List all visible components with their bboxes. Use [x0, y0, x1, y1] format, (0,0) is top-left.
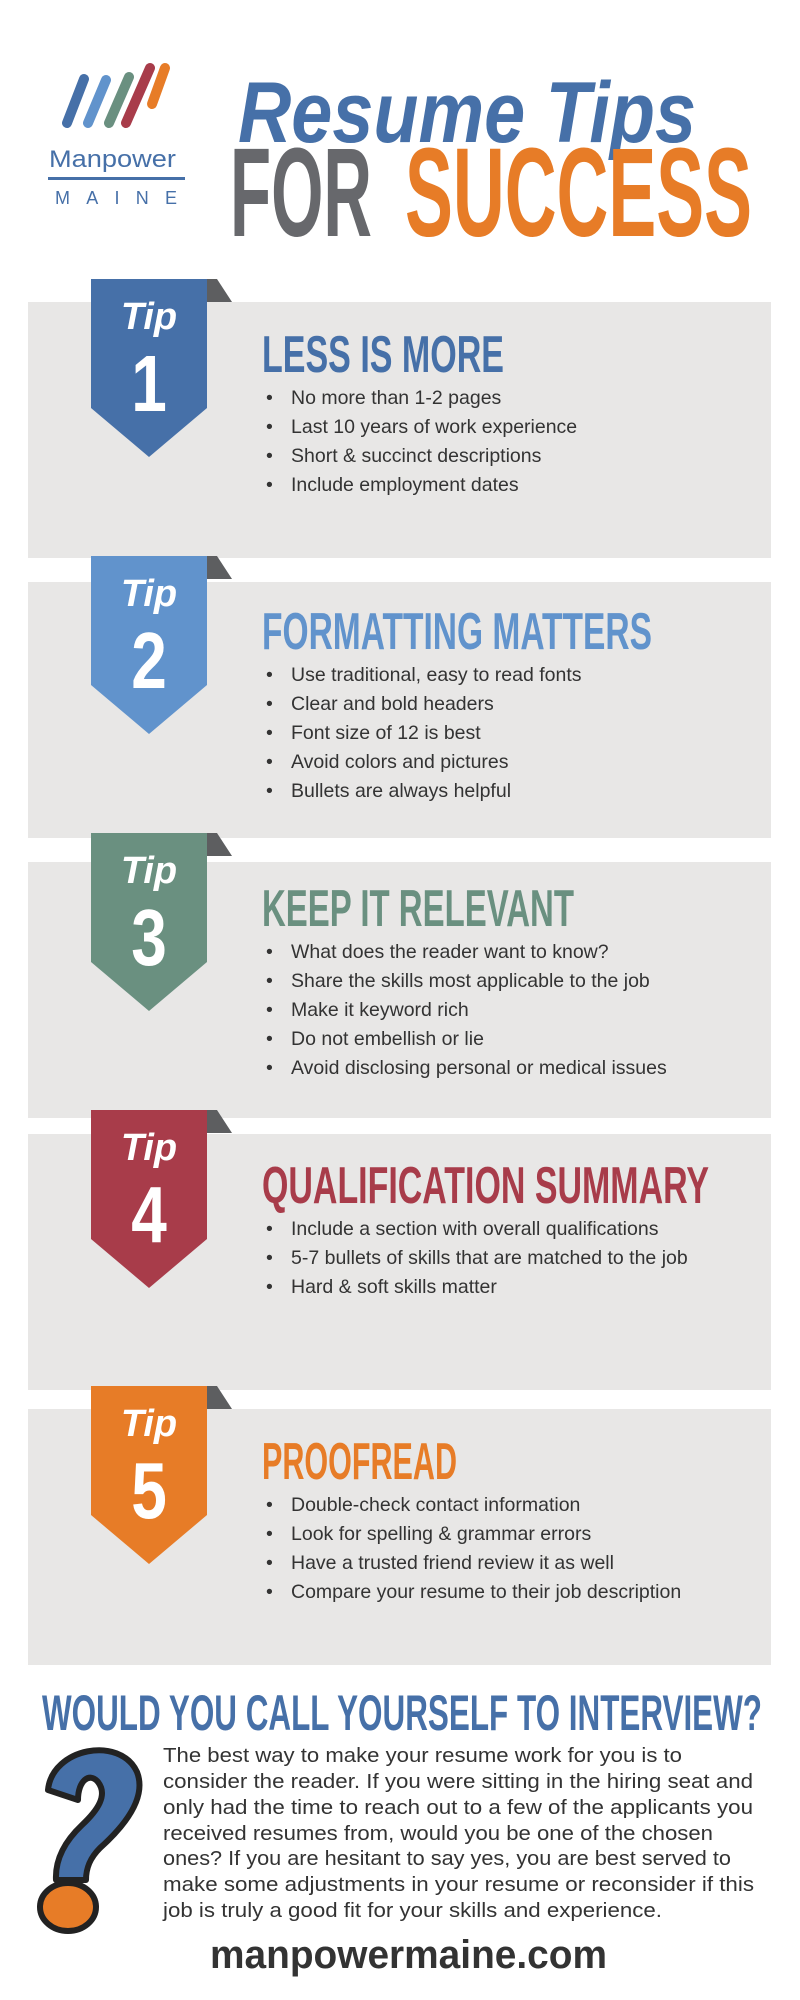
- bullets: tip 3: •: [266, 1057, 273, 1079]
- ribbon: tip 3: Tip: [121, 850, 177, 892]
- text block: paragraph: received resumes from, would you be one of the chosen: [163, 1823, 713, 1845]
- text block: paragraph: The best way to make your resume work for you is to: [163, 1745, 682, 1767]
- bullets: tip 3: Avoid disclosing personal or medical issues: [291, 1057, 667, 1079]
- bullets: tip 1: No more than 1-2 pages: [291, 387, 502, 409]
- bullets: tip 5: Have a trusted friend review it as well: [291, 1552, 614, 1574]
- bullets: tip 3: •: [266, 1028, 273, 1050]
- icon: question mark: [40, 1750, 139, 1931]
- bullets: tip 1: •: [266, 387, 273, 409]
- icon: logo stripes: [67, 68, 165, 123]
- text block: paragraph: only had the time to reach out to a few of the applicants you: [163, 1797, 753, 1819]
- bullets: tip 5: Double-check contact information: [291, 1494, 580, 1516]
- bullets: tip 2: •: [266, 780, 273, 802]
- bullets: tip 2: •: [266, 751, 273, 773]
- ribbon: tip 4: 4: [131, 1170, 167, 1260]
- bullets: tip 5: •: [266, 1523, 273, 1545]
- ribbon: tip 2: [91, 556, 232, 734]
- bullets: tip 3: What does the reader want to know?: [291, 941, 609, 963]
- bullets: tip 2: Font size of 12 is best: [291, 722, 481, 744]
- title: [230, 65, 752, 263]
- logo text: Manpower: [49, 146, 176, 173]
- bullets: tip 4: •: [266, 1218, 273, 1240]
- bullets: tip 4: Hard & soft skills matter: [291, 1276, 497, 1298]
- bullets: tip 2: •: [266, 693, 273, 715]
- ribbon: tip 3: [91, 833, 232, 1011]
- ribbon: tip 1: 1: [131, 339, 167, 429]
- ribbon: tip 5: 5: [131, 1446, 167, 1536]
- heading: proofread: PROOFREAD: [262, 1433, 457, 1491]
- panel: tip 3: [28, 833, 771, 1118]
- bullets: tip 2: •: [266, 722, 273, 744]
- title: FOR: [230, 122, 372, 263]
- bullets: tip 1: Short & succinct descriptions: [291, 445, 542, 467]
- text block: paragraph: consider the reader. If you were sitting in the hiring seat and: [163, 1771, 753, 1793]
- bullets: tip 1: •: [266, 416, 273, 438]
- bullets: tip 1: [266, 387, 577, 496]
- bullets: tip 2: [266, 664, 582, 802]
- bullets: tip 2: Bullets are always helpful: [291, 780, 511, 802]
- ribbon: tip 3: 3: [131, 893, 167, 983]
- bullets: tip 4: •: [266, 1276, 273, 1298]
- ribbon: tip 2: Tip: [121, 573, 177, 615]
- ribbon: tip 4: Tip: [121, 1127, 177, 1169]
- bullets: tip 3: Make it keyword rich: [291, 999, 469, 1021]
- bullets: tip 3: •: [266, 999, 273, 1021]
- title: Resume Tips: [238, 65, 696, 161]
- bullets: tip 2: Clear and bold headers: [291, 693, 494, 715]
- panel: tip 2: [28, 556, 771, 838]
- bullets: tip 2: •: [266, 664, 273, 686]
- bullets: tip 2: Use traditional, easy to read fonts: [291, 664, 582, 686]
- text block: paragraph: ones? If you are hesitant to say yes, you are best served to: [163, 1848, 731, 1870]
- heading: less is more: LESS IS MORE: [262, 326, 504, 384]
- bullets: tip 2: Avoid colors and pictures: [291, 751, 509, 773]
- bullets: tip 4: Include a section with overall qualifications: [291, 1218, 659, 1240]
- text block: paragraph: job is truly a good fit for your skills and experience.: [162, 1900, 662, 1922]
- bullets: tip 5: •: [266, 1494, 273, 1516]
- bullets: tip 5: •: [266, 1581, 273, 1603]
- footer: website: manpowermaine.com: [210, 1933, 607, 1977]
- bullets: tip 4: 5-7 bullets of skills that are matched to the job: [291, 1247, 688, 1269]
- heading: keep it relevant: KEEP IT RELEVANT: [262, 880, 574, 938]
- bullets: tip 4: [266, 1218, 688, 1298]
- bullets: tip 5: [266, 1494, 681, 1603]
- logo: MAINE: [55, 188, 177, 208]
- bullets: tip 1: Include employment dates: [291, 474, 519, 496]
- bullets: tip 4: •: [266, 1247, 273, 1269]
- bullets: tip 1: •: [266, 474, 273, 496]
- ribbon: tip 4: [91, 1110, 232, 1288]
- panel: tip 1: [28, 279, 771, 558]
- bullets: tip 5: Compare your resume to their job description: [291, 1581, 681, 1603]
- text block: paragraph: [162, 1745, 754, 1922]
- text block: paragraph: make some adjustments in your resume or reconsider if this: [163, 1874, 754, 1896]
- logo: [48, 68, 185, 208]
- ribbon: tip 1: [91, 279, 232, 457]
- panel: tip 5: [28, 1386, 771, 1665]
- bullets: tip 3: Do not embellish or lie: [291, 1028, 484, 1050]
- bullets: tip 3: Share the skills most applicable to the job: [291, 970, 650, 992]
- bullets: tip 5: Look for spelling & grammar errors: [291, 1523, 591, 1545]
- bullets: tip 1: •: [266, 445, 273, 467]
- bullets: tip 5: •: [266, 1552, 273, 1574]
- panel: tip 4: [28, 1110, 771, 1390]
- ribbon: tip 5: [91, 1386, 232, 1564]
- bullets: tip 3: •: [266, 970, 273, 992]
- bullets: tip 3: •: [266, 941, 273, 963]
- bullets: tip 1: Last 10 years of work experience: [291, 416, 577, 438]
- bullets: tip 3: [266, 941, 667, 1079]
- ribbon: tip 1: Tip: [121, 296, 177, 338]
- ribbon: tip 2: 2: [131, 616, 167, 706]
- ribbon: tip 5: Tip: [121, 1403, 177, 1445]
